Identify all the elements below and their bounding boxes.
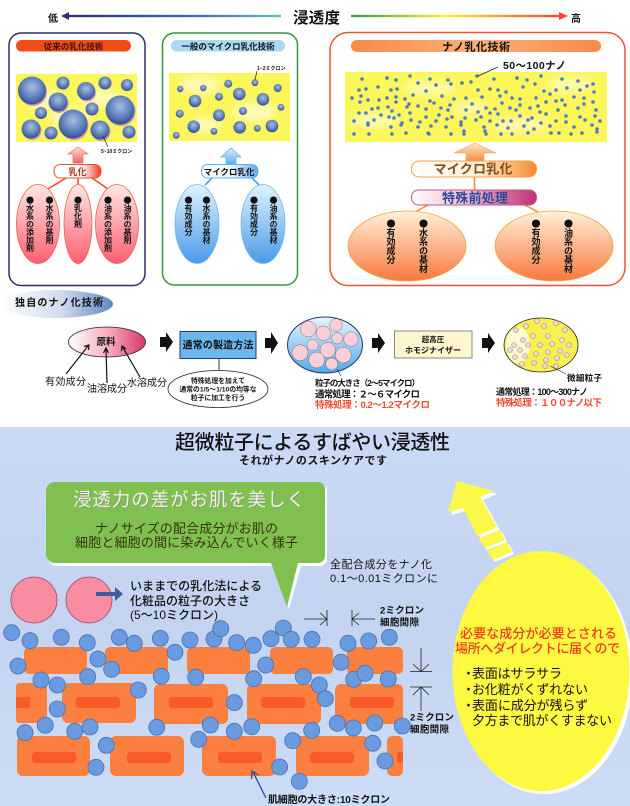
pretreatment pill: 特殊前処理 [442, 190, 508, 206]
ingredient ellipse: active and water base [348, 211, 466, 281]
dimension label side [410, 712, 454, 736]
panel heading [16, 40, 131, 52]
fine particle label: 微細粒子 [567, 373, 602, 383]
panel: micro emulsification [162, 33, 298, 285]
ingredient ellipse: active and oil base: ●有効成分 [248, 196, 260, 237]
callout list: お化粧がくずれない [472, 682, 588, 697]
arrow: toward low [61, 12, 281, 20]
speech bubble [46, 482, 327, 609]
connectors [48, 178, 108, 189]
ingredient ellipse: active and oil base: ●有効成分 [530, 219, 542, 265]
ingredient ellipse: active and oil base: ●油系の基材 [268, 196, 279, 245]
tag: proprietary nano technology [0, 290, 113, 318]
arrow 1 [160, 332, 173, 352]
ingredient ellipse: active and oil base [241, 184, 285, 264]
size callout: 5~10ミクロン [101, 148, 132, 155]
particle size text: 特殊処理：0.2～1.2マイクロ [315, 399, 430, 411]
conventional particle text: 化粧品の粒子の大きさ [130, 594, 250, 608]
process note: 特殊処理を加えて [191, 376, 245, 385]
panel heading: ナノ乳化技術 [442, 40, 510, 54]
cell size label: 肌細胞の大きさ:10ミクロン [268, 793, 390, 806]
penetration scale header [48, 8, 581, 27]
particle size text: 通常処理：２～６マイクロ [315, 388, 420, 400]
raw material ellipse [68, 327, 146, 357]
main title: 超微粒子によるすばやい浸透性 [175, 431, 450, 454]
particle field: large spheres [16, 74, 137, 142]
process box [180, 332, 256, 358]
homogenizer box: 超高圧 [422, 334, 445, 344]
callout red text: 場所へダイレクトに届くので [455, 641, 620, 656]
ingredient ellipse: active and water base: ●水系の基材 [417, 219, 430, 274]
nano ingredient particles [4, 620, 410, 789]
skin cells [16, 647, 403, 776]
dimension: vertical cell gap [410, 648, 432, 711]
size callout [478, 60, 566, 76]
panel heading [351, 40, 601, 54]
arrow: cell size [252, 771, 266, 798]
ingredient ellipse: oil additive and base: ●油系の添加剤 [102, 196, 114, 253]
panel: nano emulsification [330, 32, 625, 286]
particle field: medium spheres [169, 73, 290, 141]
arrow 3 [372, 333, 385, 353]
ingredient ellipse: active and water base: ●有効成分 [384, 219, 398, 265]
process note: 通常の1/5～1/10の均等な [179, 384, 257, 394]
connectors [205, 178, 259, 185]
arrow: particle to label [96, 587, 123, 601]
arrow: up [68, 147, 88, 163]
homogenizer box: ホモジナイザー [405, 346, 461, 355]
yellow arrow [448, 481, 514, 562]
label: high: 高 [571, 12, 581, 25]
ingredient ellipse: emulsifier [64, 184, 92, 264]
ingredient labels: 有効成分 [45, 375, 86, 388]
raw material ellipse: 原料 [96, 336, 116, 348]
subtitle: それがナノのスキンケアです [239, 453, 387, 467]
arrow: up [454, 143, 496, 161]
particle ellipse: fine particles [504, 318, 578, 374]
micro emulsify pill [412, 161, 536, 177]
ingredient ellipse: active and oil base [495, 211, 613, 281]
ingredient ellipse: water additive and base: ●水系の基剤 [44, 196, 55, 245]
homogenizer box [394, 331, 472, 358]
conventional particle text: いままでの乳化法による [130, 578, 262, 593]
micro emulsify pill: マイクロ乳化 [204, 167, 255, 177]
tag: proprietary nano technology: 独自のナノ化技術 [15, 296, 103, 309]
particle ellipse: micro particles [288, 317, 362, 376]
ingredient labels [45, 375, 167, 395]
process flow [45, 317, 602, 411]
nano text: 全配合成分をナノ化 [330, 557, 432, 571]
ingredient labels: 油溶成分 [87, 382, 127, 395]
ingredient labels: 水溶成分 [127, 377, 167, 389]
callout list: ・ [462, 666, 475, 681]
arrow: up [221, 148, 241, 164]
callout list [462, 666, 612, 728]
ingredient ellipse: water additive and base: ●水系の添加剤 [24, 196, 36, 253]
bubble text: 細胞と細胞の間に染み込んでいく様子 [75, 535, 298, 550]
yellow ellipse callout [452, 551, 630, 794]
callout red text [455, 626, 620, 656]
arrow 2 [265, 332, 278, 354]
panel: conventional emulsification [9, 33, 145, 286]
ingredient ellipse: oil additive and base: ●油系の基剤 [122, 196, 133, 245]
callout list: 夕方まで肌がくすまない [472, 713, 612, 728]
arrow: toward high [351, 12, 568, 20]
ingredient ellipse: water additive and base [16, 184, 60, 264]
ingredient ellipse: emulsifier: ●乳化剤 [72, 196, 84, 229]
dimension: horizontal cell gap [304, 610, 375, 626]
fine particle size text: 通常処理：100～300ナノ [496, 386, 588, 397]
process note: 粒子に加工を行う [191, 393, 245, 402]
panel heading: 一般のマイクロ乳化技術 [181, 42, 275, 52]
callout list: ・ [462, 698, 475, 713]
nano text [330, 557, 438, 585]
panel: skin penetration [0, 427, 630, 806]
size callout [255, 65, 285, 80]
dimension label side: 細胞間隙 [410, 724, 449, 736]
fine particle size text: 特殊処理：１００ナノ以下 [496, 397, 602, 409]
bubble heading: 浸透力の差がお肌を美しく [73, 489, 305, 510]
ingredient ellipse: oil additive and base [96, 184, 138, 264]
dimension label top [380, 606, 424, 628]
particle size text [315, 378, 430, 411]
process box: 通常の製造方法 [182, 338, 254, 352]
dimension label side: 2ミクロン [410, 712, 454, 724]
conventional particle text: (5～10ミクロン) [130, 608, 218, 622]
nano text: 0.1～0.01ミクロンに [330, 572, 438, 585]
ingredient ellipse: active and water base: ●有効成分 [183, 196, 194, 237]
bubble heading: 浸透力の差がお肌を美しく [74, 490, 306, 511]
panel heading: 従来の乳化技術 [44, 42, 104, 52]
size callout: 50～100ナノ [503, 60, 566, 72]
micro emulsify pill [202, 164, 258, 178]
dimension label top: 細胞間隙 [380, 616, 419, 628]
emulsify pill [54, 164, 101, 178]
emulsify pill: 乳化 [68, 166, 87, 177]
pretreatment pill [412, 190, 536, 206]
ingredient ellipse: active and water base [175, 184, 219, 264]
size callout: 1~2ミクロン [257, 65, 285, 72]
size callout [101, 136, 132, 155]
ingredient arrows [66, 345, 140, 383]
callout list: 表面に成分が残らず [472, 698, 588, 713]
process note [168, 370, 268, 408]
callout list: 表面はサラサラ [472, 666, 562, 681]
connector [415, 177, 538, 212]
callout red text: 必要な成分が必要とされる [460, 626, 617, 641]
heading: penetration: 浸透度 [293, 8, 340, 27]
bubble text: ナノサイズの配合成分がお肌の [95, 521, 278, 536]
ingredient ellipse: active and oil base: ●油系の基材 [562, 219, 575, 274]
particle size text: 粒子の大きさ（2～5マイクロ） [315, 378, 420, 388]
bubble text [75, 521, 298, 550]
particle field: nano dots [345, 72, 607, 142]
dimension label top: 2ミクロン [380, 606, 424, 616]
ingredient ellipse: active and water base: ●水系の基材 [201, 196, 212, 245]
label: low: 低 [48, 12, 58, 25]
conventional particles [11, 577, 112, 623]
arrow 4 [482, 333, 495, 353]
micro emulsify pill: マイクロ乳化 [434, 162, 512, 176]
fine particle size text [496, 386, 602, 409]
conventional particle text [130, 578, 262, 622]
callout list: ・ [462, 682, 475, 697]
